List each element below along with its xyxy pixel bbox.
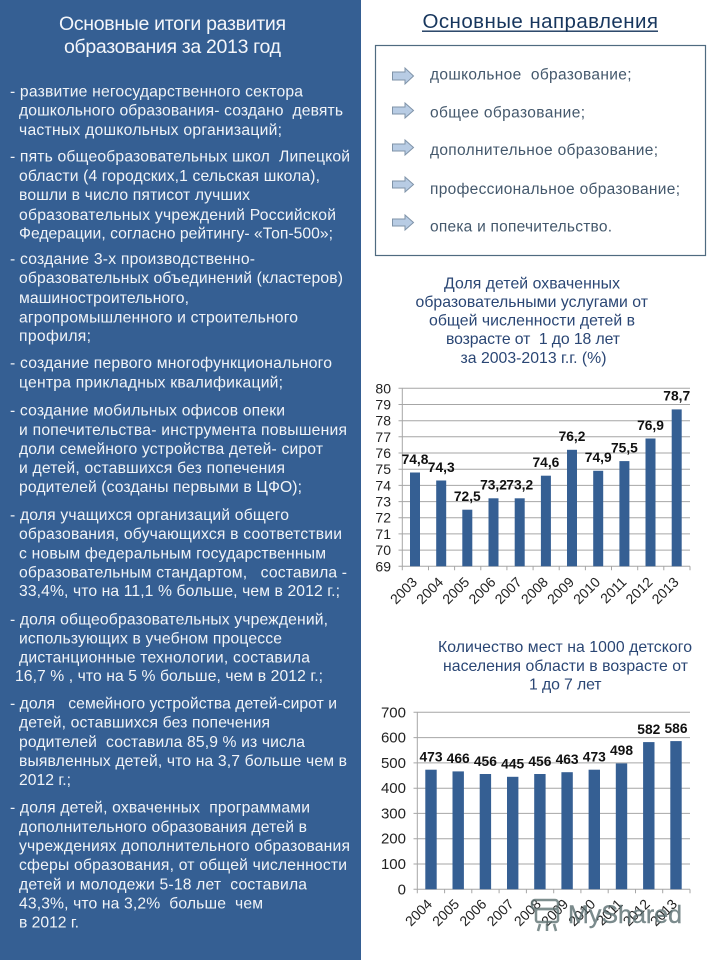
text block: item 9: 43,3%, что на 3,2% больше чем	[19, 896, 263, 912]
text block: item 3: образовательных объединений (кластеров)	[19, 270, 343, 287]
text block: item 4	[10, 355, 332, 392]
icon: arrow 4	[392, 177, 414, 192]
y axis labels: 200	[381, 831, 406, 848]
icon: arrow 1	[392, 68, 414, 84]
x axis labels: 2008	[511, 896, 544, 929]
icon: arrow 2	[392, 103, 414, 118]
list text: опека и попечительство.	[430, 218, 612, 236]
text block: item 8: детей, оставшихся без попечения	[19, 714, 270, 732]
x axis labels: 2008	[518, 574, 551, 607]
text block: item 2	[10, 148, 350, 242]
text block: item 8: родителей составила 85,9 % из числа	[19, 734, 305, 751]
text block: item 8: - доля семейного устройства детей-сирот и	[10, 696, 337, 712]
x axis labels: 2004	[402, 896, 435, 929]
bar chart: share of children 2003-2013	[375, 380, 690, 607]
data labels: 466	[447, 751, 470, 766]
bars	[410, 409, 682, 566]
x axis labels	[387, 574, 682, 607]
x axis labels: 2004	[413, 574, 446, 607]
text block: item 9: в 2012 г.	[19, 914, 79, 932]
y axis labels: 400	[381, 780, 406, 797]
text block: item 7: использующих в учебном процессе	[19, 630, 282, 648]
bars	[425, 741, 682, 889]
text block: item 2: - пять общеобразовательных школ Липецкой	[10, 148, 350, 166]
text block: item 9: дополнительного образования детей в	[19, 819, 307, 836]
text block: item 7: - доля общеобразовательных учреждений,	[10, 612, 328, 628]
chart title: share of children	[416, 276, 648, 367]
list text: дополнительное образование;	[430, 142, 658, 159]
x axis labels: 2007	[491, 574, 525, 607]
y axis labels: 500	[381, 755, 406, 772]
text block: item 5: и детей, оставшихся без попечения	[19, 460, 285, 477]
list text: профессиональное образование;	[430, 181, 680, 198]
data labels: 456	[474, 754, 497, 769]
text block: item 6: с новым федеральным государственным	[19, 546, 326, 562]
y axis labels: 78	[375, 413, 391, 429]
y axis labels: 69	[375, 558, 391, 574]
chart title: places per 1000: 1 до 7 лет	[529, 676, 602, 694]
chart title: share of children: возрасте от 1 до 18 лет	[446, 331, 620, 348]
data labels: 463	[556, 752, 579, 767]
text block: item 8	[10, 696, 347, 789]
text block: item 1: дошкольного образования- создано девять	[19, 102, 343, 120]
y axis labels: 700	[381, 704, 406, 721]
x axis labels: 2010	[565, 896, 599, 929]
text block: item 3	[10, 251, 343, 345]
y axis labels: 77	[375, 429, 391, 445]
data labels	[419, 721, 688, 772]
y axis labels: 73	[375, 494, 391, 510]
chart title: share of children: Доля детей охваченных	[444, 276, 620, 292]
chart title: places per 1000: населения области в возрасте от	[443, 658, 688, 675]
y axis labels: 71	[375, 526, 391, 542]
text block: item 3: - создание 3-х производственно-	[10, 251, 255, 268]
text block: item 6: 33,4%, что на 11,1 % больше, чем в 2012 г.;	[19, 583, 340, 600]
text block: item 7: 16,7 % , что на 5 % больше, чем в 2012 г.;	[15, 668, 323, 685]
data labels: 75,5	[611, 440, 638, 455]
chart title: share of children: за 2003-2013 г.г. (%)	[460, 350, 606, 367]
x axis labels: 2012	[620, 896, 653, 929]
text block: item 9: сферы образования, от общей численности	[19, 857, 347, 874]
data labels: 74,3	[428, 460, 455, 475]
x axis labels: 2013	[648, 574, 682, 607]
y axis labels: 76	[375, 445, 391, 461]
chart title: places per 1000: Количество мест на 1000 детского	[438, 639, 692, 656]
text block: item 1: частных дошкольных организаций;	[19, 122, 282, 139]
text block: item 6	[10, 507, 347, 600]
text block: item 1	[10, 84, 343, 139]
y axis labels: 600	[381, 730, 406, 747]
x axis labels: 2010	[570, 574, 603, 607]
text block: item 5: - создание мобильных офисов опеки	[10, 402, 285, 420]
text block: item 9: детей и молодежи 5-18 лет составила	[19, 876, 307, 894]
x axis labels: 2011	[593, 896, 626, 928]
data labels: 586	[664, 721, 688, 736]
text block: item 9	[10, 800, 350, 932]
x axis labels: 2006	[456, 896, 490, 929]
icon: watermark cart	[532, 900, 558, 931]
y axis labels	[375, 380, 391, 574]
data labels: 582	[637, 722, 661, 737]
heading: main results: Основные итоги развития	[59, 13, 286, 35]
text block: item 6: - доля учащихся организаций общего	[10, 507, 289, 524]
heading: main results: образования за 2013 год	[64, 36, 282, 58]
panel: directions list	[376, 46, 706, 256]
data labels: 74,8	[402, 452, 429, 467]
data labels: 456	[528, 754, 552, 769]
text block: item 5: родителей (созданы первыми в ЦФО);	[19, 479, 302, 496]
list text: общее образование;	[430, 104, 585, 122]
text block: item 4: центра прикладных квалификаций;	[19, 374, 283, 392]
text block: item 2: Федерации, согласно рейтингу- «Топ-500»;	[19, 226, 333, 242]
text block: item 6: образования, обучающихся в соответствии	[19, 526, 342, 543]
text block: item 7	[10, 612, 328, 685]
x axis labels: 2007	[483, 896, 517, 929]
x axis labels: 2005	[429, 896, 462, 929]
x axis labels: 2009	[538, 896, 571, 929]
text block: item 2: образовательных учреждений Российской	[19, 207, 336, 224]
text block: item 1: - развитие негосударственного сектора	[10, 84, 303, 100]
data labels: 76,9	[637, 418, 664, 433]
y axis labels: 100	[381, 856, 406, 873]
text block: item 8: 2012 г.;	[19, 772, 71, 789]
list text	[430, 66, 680, 236]
chart title: places per 1000	[438, 639, 692, 694]
data labels: 74,9	[585, 450, 612, 465]
y axis labels: 79	[375, 396, 391, 412]
y axis labels: 0	[398, 881, 406, 898]
x axis labels: 2003	[387, 574, 420, 607]
x axis labels: 2011	[597, 574, 630, 606]
heading: main directions: Основные направления	[422, 10, 658, 33]
list text: дошкольное образование;	[430, 66, 632, 84]
heading: main results	[59, 13, 286, 58]
data labels: 473	[419, 750, 443, 764]
y axis labels: 72	[375, 510, 391, 526]
data labels: 78,7	[663, 389, 690, 404]
text block: item 2: области (4 городских,1 сельская школа),	[19, 168, 320, 185]
text block: item 8: выявленных детей, что на 3,7 больше чем в	[19, 753, 347, 770]
icon: arrow 5	[392, 215, 414, 230]
watermark: MyShared	[532, 900, 682, 931]
text block: item 5: доли семейного устройства детей- сирот	[19, 441, 323, 458]
data labels: 498	[610, 743, 633, 758]
panel: left results	[0, 0, 361, 960]
y axis labels: 70	[375, 542, 391, 558]
y axis labels: 300	[381, 805, 406, 822]
data labels: 73,2	[480, 478, 507, 493]
x axis labels: 2006	[465, 574, 499, 607]
data labels: 473	[583, 750, 606, 764]
chart title: share of children: общей численности детей в	[429, 312, 635, 330]
chart title: share of children: образовательными услугами от	[416, 294, 648, 311]
y axis labels	[381, 704, 406, 898]
watermark: MyShared: MyShared	[568, 901, 682, 929]
y axis labels: 74	[375, 477, 391, 493]
y axis labels: 80	[375, 380, 391, 396]
text block: item 3: агропромышленного и строительного	[19, 310, 298, 326]
text block: item 3: машиностроительного,	[19, 290, 189, 307]
x axis labels: 2013	[647, 896, 680, 929]
text block: item 5	[10, 402, 347, 496]
text block: item 2: вошли в число пятисот лучших	[19, 187, 250, 204]
data labels: 73,2	[506, 478, 533, 493]
x axis labels	[402, 896, 680, 929]
bar chart: places per 1000 children 2004-2013	[381, 704, 690, 929]
data labels	[402, 389, 690, 504]
icon: arrow 3	[392, 140, 414, 155]
data labels: 76,2	[559, 429, 586, 444]
data labels: 445	[501, 757, 525, 772]
y axis labels: 75	[375, 461, 391, 477]
text block: item 3: профиля;	[19, 328, 91, 345]
text block: item 4: - создание первого многофункционального	[10, 355, 332, 372]
x axis labels: 2009	[544, 574, 577, 607]
text block: item 5: и попечительства- инструмента повышения	[19, 422, 347, 439]
text block: item 9: - доля детей, охваченных программами	[10, 800, 310, 816]
x axis labels: 2012	[622, 574, 656, 607]
x axis labels: 2005	[439, 574, 473, 607]
data labels: 74,6	[532, 455, 560, 470]
data labels: 72,5	[454, 489, 481, 504]
text block: item 6: образовательным стандартом, составила -	[19, 564, 347, 582]
text block: item 7: дистанционные технологии, составила	[19, 650, 310, 666]
text block: item 9: учреждениях дополнительного образования	[19, 838, 350, 855]
